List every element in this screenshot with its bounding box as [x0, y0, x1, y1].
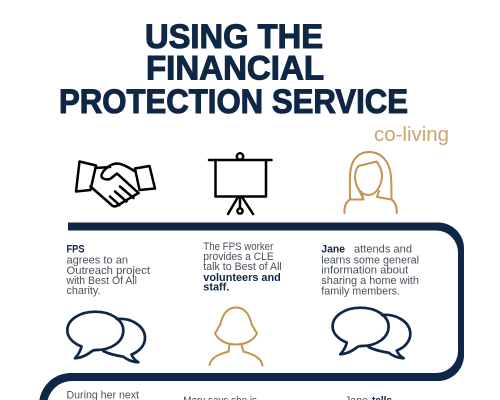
text: CLE talk step: volunteers and	[203, 272, 281, 284]
text: CLE talk step: The FPS worker	[203, 241, 274, 253]
text: FPS step: charity.	[66, 285, 100, 297]
title: USING THE	[145, 18, 323, 56]
text: CLE talk step	[203, 241, 282, 294]
title: PROTECTION SERVICE	[59, 83, 408, 121]
icon: speech bubbles right	[333, 308, 410, 358]
text: Jane step: learns some general	[321, 254, 419, 266]
title	[59, 18, 408, 121]
icon: woman with short hair	[210, 308, 262, 366]
icon: handshake	[76, 162, 155, 206]
text: FPS step	[66, 244, 150, 297]
text: CLE talk step: staff.	[203, 282, 229, 294]
text: Jane step: family members.	[321, 285, 400, 297]
text: CLE talk step: talk to Best of All	[203, 261, 282, 273]
text: Jane step: information about	[321, 265, 408, 277]
text: Jane step	[321, 244, 419, 297]
text: FPS step: FPS	[66, 244, 84, 256]
icon: woman with long hair	[344, 152, 397, 213]
text: FPS step: with Best Of All	[66, 275, 137, 287]
text: Jane step: Jane	[321, 244, 345, 256]
text: Jane tells step	[345, 395, 392, 400]
subtitle: co-living: co-living	[374, 124, 449, 146]
icon: presentation board	[209, 153, 272, 214]
icon: speech bubbles left	[67, 312, 145, 362]
title: FINANCIAL	[146, 50, 324, 88]
text: CLE talk step: provides a CLE	[203, 251, 274, 263]
text: FPS step: Outreach project	[66, 265, 150, 277]
text: Jane step: sharing a home with	[321, 275, 419, 287]
text: Jane step: attends and	[354, 244, 412, 256]
text: FPS step: agrees to an	[66, 254, 128, 266]
timeline band	[39, 222, 464, 400]
